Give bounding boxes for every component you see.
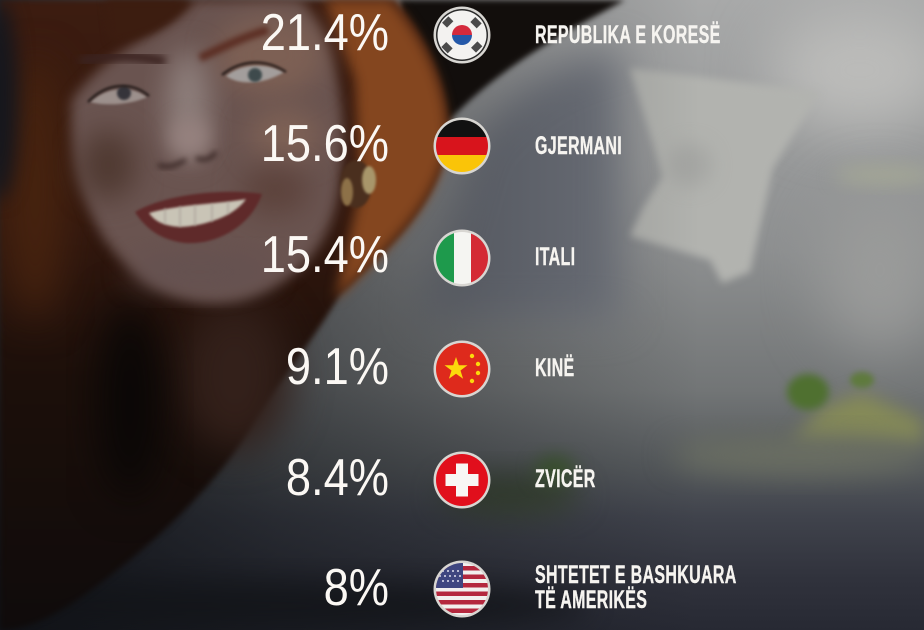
icon: Italy flag: [434, 230, 490, 286]
earring: [340, 160, 376, 208]
label: KINË: [535, 354, 575, 382]
row 4: Kinë: [286, 338, 575, 398]
icon: Germany flag: [434, 118, 490, 174]
value: 9.1%: [286, 338, 389, 396]
label: ZVICËR: [535, 465, 596, 493]
eyebrows: [80, 56, 165, 62]
fringe: [105, 0, 190, 42]
woman's hair: [0, 0, 448, 630]
icon: South Korea flag: [434, 6, 490, 64]
icon: USA flag: [434, 560, 490, 618]
row 2: Gjermani: [261, 115, 622, 174]
row 5: Zvicër: [286, 449, 596, 508]
row 6: Shtetet e Bashkuara të Amerikës: [324, 559, 737, 618]
value: 15.4%: [261, 226, 389, 284]
label: TË AMERIKËS: [535, 586, 647, 614]
value: 15.6%: [261, 115, 389, 173]
label: ITALI: [535, 243, 575, 271]
icon: Switzerland flag: [434, 452, 490, 508]
row 1: Republika e Koresë: [261, 4, 721, 64]
woman's face: [71, 0, 343, 302]
value: 8%: [324, 559, 389, 617]
dark left edge: [0, 0, 18, 200]
value: 8.4%: [286, 449, 389, 507]
eye: left: [90, 89, 147, 104]
nose: [170, 118, 210, 158]
icon: China flag: [434, 340, 490, 398]
label: GJERMANI: [535, 132, 622, 160]
mouth: [135, 192, 262, 243]
value: 21.4%: [261, 4, 389, 62]
row 3: Itali: [261, 226, 575, 286]
label: REPUBLIKA E KORESË: [535, 21, 721, 49]
dark car interior top: [400, 0, 625, 135]
eye: right: [226, 66, 284, 82]
label: [535, 561, 737, 614]
label: SHTETET E BASHKUARA: [535, 561, 737, 589]
